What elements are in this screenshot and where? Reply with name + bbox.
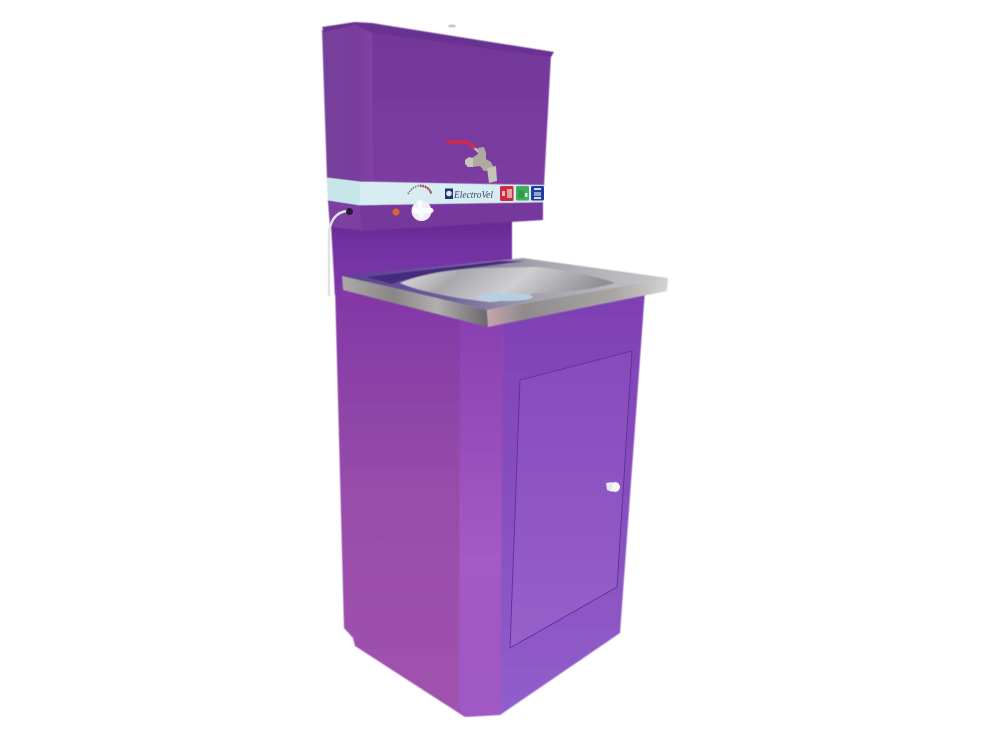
tank left face (322, 23, 376, 182)
door knob (606, 482, 620, 492)
tank lid (322, 22, 554, 57)
sink top rim (342, 258, 668, 310)
tank front face (372, 30, 551, 186)
sink right edge (487, 278, 668, 327)
stainless steel sink (342, 258, 668, 327)
blue badge (531, 186, 544, 200)
cabinet left side (335, 285, 465, 717)
temperature dial (412, 200, 434, 221)
control label strip (327, 178, 544, 205)
green badge (516, 186, 529, 200)
red badge (500, 186, 514, 201)
cabinet (335, 285, 645, 717)
water heater tank (322, 22, 554, 231)
tank lower band (328, 200, 543, 231)
tap handle (448, 142, 474, 147)
tap stem (471, 145, 480, 153)
indicator lamp (392, 208, 400, 216)
shadow reflection on rim (366, 261, 525, 284)
tap body (472, 147, 495, 171)
cabinet front (500, 290, 645, 715)
sink left edge (342, 276, 488, 327)
brand logo (445, 188, 493, 201)
white blemish above tank (448, 24, 456, 28)
brand logo: ElectroVel (453, 190, 493, 201)
water tap (448, 142, 497, 183)
temperature scale (408, 185, 431, 194)
tap spout (487, 166, 497, 183)
power cable (329, 208, 353, 296)
backsplash panel (331, 218, 512, 295)
cabinet door (510, 351, 632, 648)
tap nut (465, 157, 473, 167)
cabinet corner strip (459, 316, 503, 717)
sink basin (400, 267, 615, 302)
